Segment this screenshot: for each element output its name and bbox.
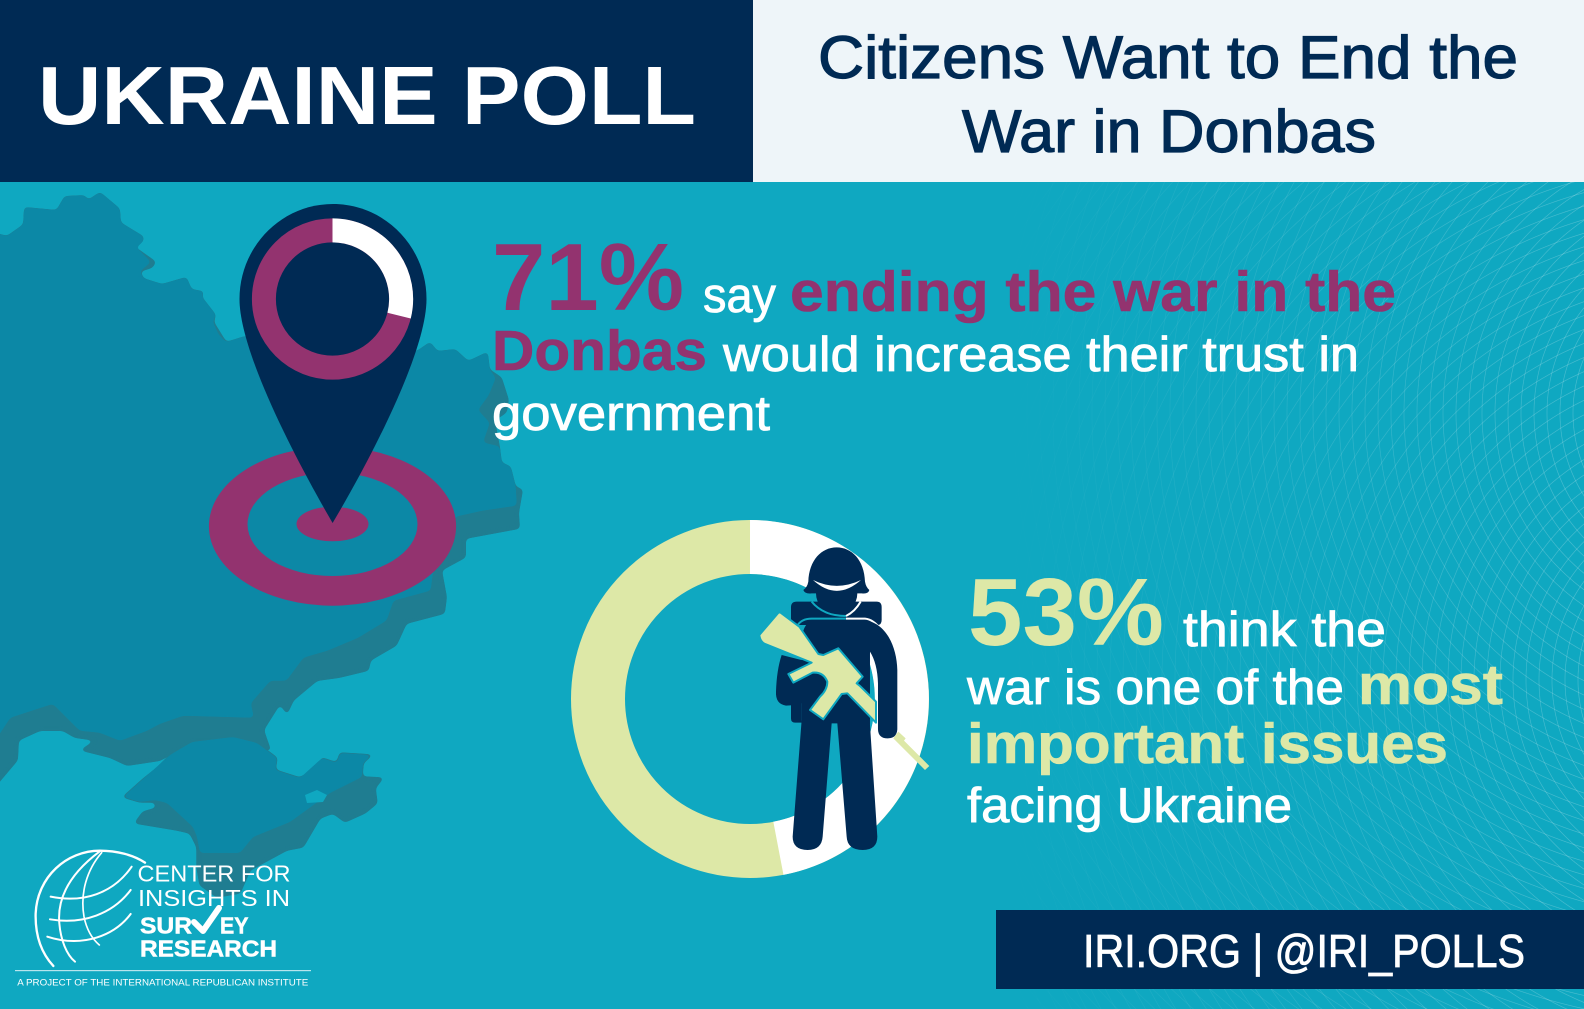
head and helmet	[816, 573, 857, 614]
stat: 71 percent text: say	[703, 269, 776, 323]
subtitle text: War in Donbas	[962, 98, 1376, 165]
icon: globe	[36, 851, 145, 966]
footer bar: contact	[996, 910, 1584, 989]
logo: Center for Insights in Survey Research: CENTER FOR	[138, 861, 290, 887]
stat: 53 percent text: facing Ukraine	[967, 779, 1292, 833]
stat: 71 percent text: 71%	[492, 224, 684, 331]
subtitle text: Citizens Want to End the	[818, 24, 1518, 91]
left arm	[776, 655, 827, 706]
stat: 53 percent text: most	[1358, 653, 1503, 717]
stat: 71 percent text: would increase their trust in	[722, 328, 1359, 382]
stat: 71 percent text: Donbas	[492, 319, 707, 383]
icon: soldier with rifle	[759, 547, 929, 850]
backpack	[791, 602, 882, 625]
logo: Center for Insights in Survey Research	[15, 851, 311, 988]
stat: 53 percent text: 53%	[968, 559, 1164, 666]
stat: 53 percent text: important issues	[967, 712, 1448, 776]
ring chart: 71 percent	[264, 230, 401, 368]
stat: 71 percent text: government	[492, 387, 770, 441]
logo: Center for Insights in Survey Research: EY	[220, 912, 248, 938]
target ellipses	[209, 447, 456, 606]
stat: 53 percent text	[966, 559, 1503, 833]
logo: Center for Insights in Survey Research: RESEARCH	[140, 936, 277, 962]
logo: Center for Insights in Survey Research: A PROJECT OF THE INTERNATIONAL REPUBLICAN INSTITUTE	[17, 978, 308, 988]
stat: 53 percent text: think the	[1183, 603, 1386, 657]
donut chart: 53 percent	[598, 547, 902, 851]
stat: 53 percent text: war is one of the	[966, 661, 1344, 715]
header panel: subtitle	[753, 0, 1584, 182]
stat: 71 percent text	[492, 224, 1396, 441]
contact text: IRI.ORG | @IRI_POLLS	[1083, 925, 1525, 977]
torso, legs and right arm	[793, 621, 897, 850]
stat: 71 percent text: ending the war in the	[790, 260, 1396, 324]
rifle body	[759, 612, 876, 723]
rifle muzzle	[893, 732, 929, 770]
logo: Center for Insights in Survey Research: INSIGHTS IN	[138, 885, 290, 911]
pin body	[240, 204, 426, 523]
heading: UKRAINE POLL: UKRAINE POLL	[38, 49, 696, 142]
map of Ukraine	[0, 193, 522, 897]
header panel: Ukraine Poll	[0, 0, 753, 182]
logo: Center for Insights in Survey Research: SUR	[140, 912, 192, 938]
icon: checkmark	[194, 908, 219, 931]
Crimea	[123, 737, 383, 897]
icon: location pin with 71% ring and target	[209, 204, 456, 606]
body outline gap	[797, 619, 846, 626]
